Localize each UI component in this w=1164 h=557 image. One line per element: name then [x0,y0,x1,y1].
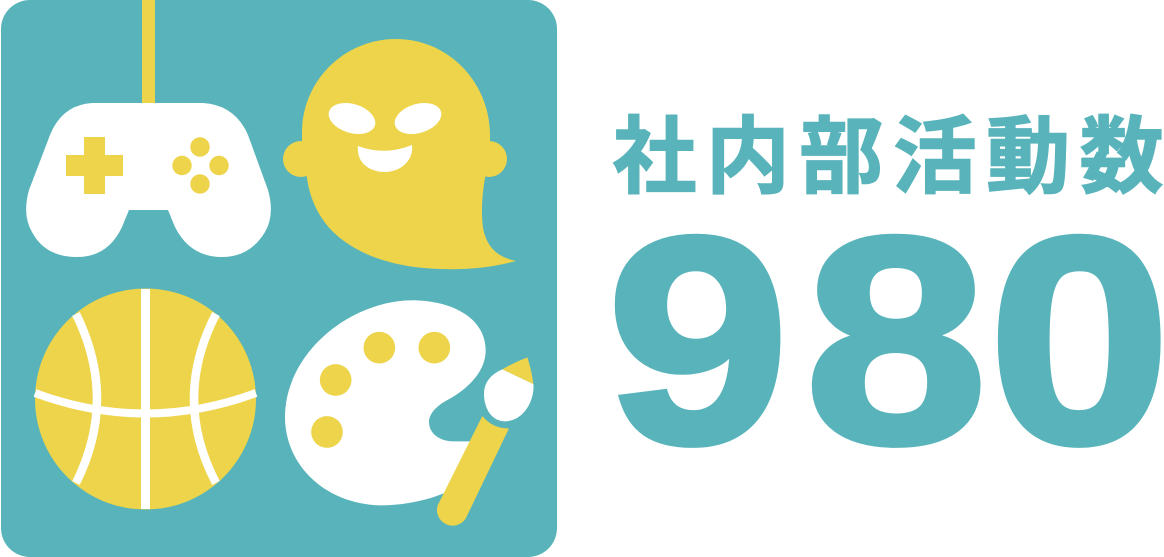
icon: basketball [35,288,256,510]
number: 980: 8 [805,177,987,505]
number: 980: 9 [607,177,789,505]
number: 980 [607,177,1164,505]
icon: paint palette and brush [285,300,533,526]
heading: 社内部活動数: 社内部活動数 [612,110,1164,204]
panel: teal icon tile [1,0,557,557]
icon: ghost [283,39,516,269]
icon: game controller [26,0,271,257]
